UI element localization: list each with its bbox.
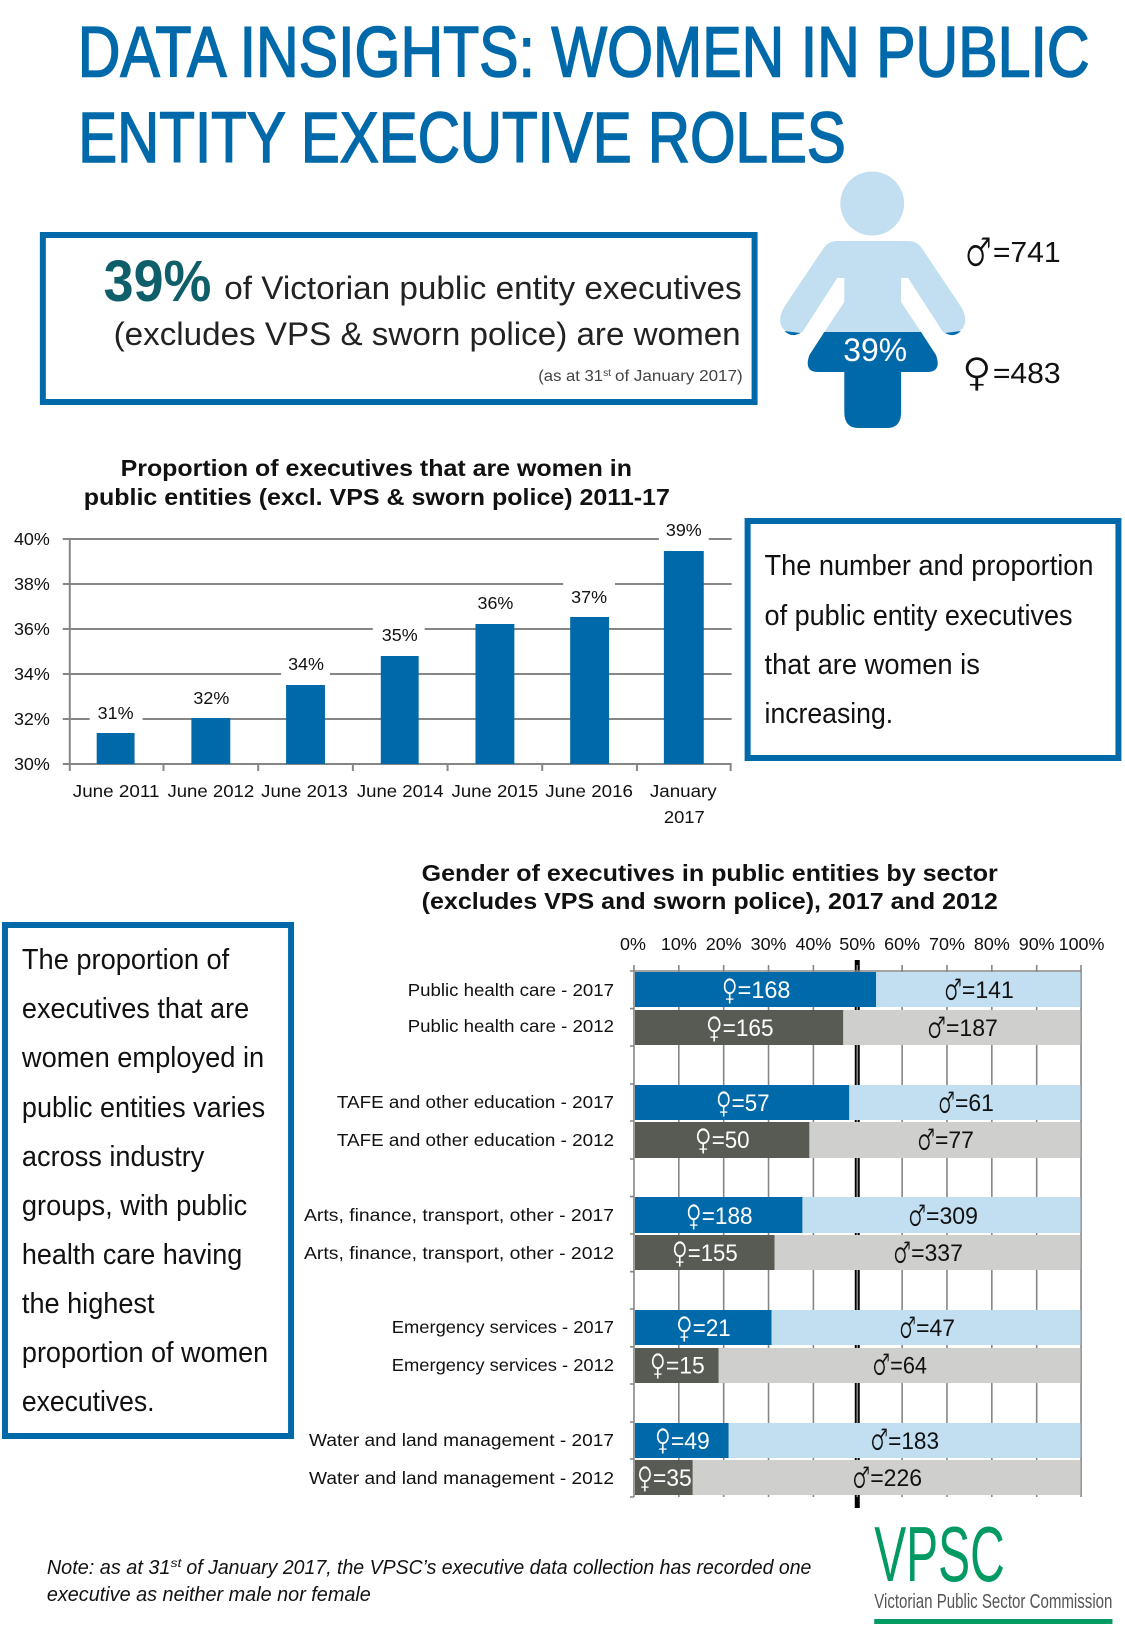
bar chart: proportion of executives that are women 2011-17: 34% bbox=[288, 654, 324, 674]
footnote: st bbox=[170, 1556, 182, 1570]
callout: proportion varies across industry groups: executives that are bbox=[22, 993, 249, 1025]
bar: Water and land management 2017: ♀ bbox=[655, 1423, 671, 1458]
bar chart: proportion of executives that are women 2011-17: 32% bbox=[14, 709, 50, 729]
footnote bbox=[47, 1556, 811, 1606]
bar: Emergency services 2012 bbox=[392, 1348, 1081, 1383]
stacked bar chart: gender by sector: 20% bbox=[706, 934, 742, 954]
bar: TAFE and other education 2017: ♂ bbox=[938, 1086, 955, 1121]
callout: 39% of executives: (as at 31 bbox=[538, 368, 603, 385]
bar: Emergency services 2017: ♂ bbox=[899, 1311, 916, 1346]
stacked bar chart: gender by sector bbox=[304, 934, 1104, 1508]
bar: Public health care 2012: Public health care - 2012 bbox=[408, 1016, 614, 1036]
bar chart: proportion of executives that are women 2011-17: 36% bbox=[14, 619, 50, 639]
callout: 39% of executives: 39% bbox=[104, 250, 211, 314]
bar: Arts, finance, transport, other 2017: ♂ bbox=[908, 1199, 926, 1234]
bar chart: proportion of executives that are women 2011-17: 38% bbox=[14, 574, 50, 594]
logo: VPSC bbox=[874, 1511, 1112, 1624]
bar chart: proportion of executives that are women 2011-17: June 2014 bbox=[357, 781, 444, 801]
bar: TAFE and other education 2012: =77 bbox=[935, 1127, 974, 1154]
callout: 39% of executives: of Victorian public entity executives bbox=[224, 270, 742, 306]
bar: TAFE and other education 2017: =57 bbox=[732, 1090, 770, 1117]
bar chart: proportion of executives that are women 2011-17: June 2011 bbox=[73, 781, 159, 801]
bar: Emergency services 2017: =21 bbox=[693, 1315, 731, 1342]
bar chart: proportion of executives that are women 2011-17: 36% bbox=[477, 593, 513, 613]
bar: Water and land management 2012: Water and land management - 2012 bbox=[309, 1468, 614, 1488]
bar: Emergency services 2012: =64 bbox=[890, 1352, 927, 1380]
stacked bar chart: gender by sector: 40% bbox=[795, 934, 831, 954]
bar: Arts, finance, transport, other 2012: ♂ bbox=[893, 1236, 911, 1271]
callout: proportion varies across industry groups: the highest bbox=[22, 1288, 155, 1320]
bar: Arts, finance, transport, other 2012: ♀ bbox=[672, 1236, 688, 1271]
footnote: Note: as at 31 bbox=[47, 1557, 170, 1579]
bar: Arts, finance, transport, other 2017 bbox=[304, 1197, 1081, 1234]
bar: Arts, finance, transport, other 2017: ♀ bbox=[686, 1199, 702, 1234]
callout: proportion varies across industry groups: across industry bbox=[22, 1141, 205, 1173]
bar: Public health care 2017: ♂ bbox=[944, 973, 962, 1008]
bar: Public health care 2012: =187 bbox=[946, 1015, 998, 1042]
female count: ♀ bbox=[962, 350, 992, 396]
bar: Public health care 2012: =165 bbox=[723, 1015, 774, 1042]
bar chart: proportion of executives that are women 2011-17: 32% bbox=[193, 688, 229, 708]
male count bbox=[965, 230, 1061, 276]
bar: Arts, finance, transport, other 2012: =155 bbox=[688, 1240, 738, 1267]
bar: Emergency services 2012: =15 bbox=[666, 1352, 705, 1380]
bar: Water and land management 2017: Water and land management - 2017 bbox=[309, 1430, 614, 1450]
bar: Public health care 2012: ♂ bbox=[927, 1011, 946, 1046]
callout: 39% of executives: of January 2017) bbox=[615, 368, 743, 385]
bar chart: proportion of executives that are women 2011-17: 31% bbox=[98, 703, 134, 723]
bar: Arts, finance, transport, other 2012 bbox=[304, 1235, 1081, 1271]
bar: Water and land management 2012: ♀ bbox=[637, 1461, 653, 1496]
bar: Emergency services 2017: ♀ bbox=[676, 1311, 693, 1346]
bar: TAFE and other education 2012 bbox=[337, 1122, 1081, 1158]
callout: proportion varies across industry groups: The proportion of bbox=[22, 944, 230, 976]
stacked bar chart: gender by sector: 90% bbox=[1019, 934, 1055, 954]
bar: Public health care 2012: ♀ bbox=[706, 1011, 723, 1046]
bar: Emergency services 2017 bbox=[392, 1310, 1081, 1346]
stacked bar chart: gender by sector: 60% bbox=[884, 934, 920, 954]
title: ENTITY EXECUTIVE ROLES bbox=[78, 99, 846, 178]
bar chart: proportion of executives that are women 2011-17: 40% bbox=[14, 529, 50, 549]
callout: proportion varies across industry groups: public entities varies bbox=[22, 1092, 265, 1124]
bar chart: proportion of executives that are women 2011-17: June 2012 bbox=[167, 781, 254, 801]
bar: Emergency services 2017: =47 bbox=[916, 1315, 955, 1342]
bar chart: proportion of executives that are women 2011-17 bbox=[14, 520, 732, 827]
callout: number and proportion increasing: that are women is bbox=[765, 649, 980, 681]
bar: Emergency services 2012: Emergency services - 2012 bbox=[392, 1355, 614, 1375]
bar chart: proportion of executives that are women 2011-17: 34% bbox=[14, 664, 50, 684]
callout: number and proportion increasing: increasing. bbox=[765, 698, 893, 730]
heading: proportion chart bbox=[84, 455, 670, 510]
bar: Public health care 2017: Public health care - 2017 bbox=[408, 980, 614, 1000]
callout: 39% of executives: st bbox=[603, 368, 611, 379]
bar chart: proportion of executives that are women 2011-17: June 2015 bbox=[452, 781, 538, 801]
bar: Public health care 2017: =141 bbox=[962, 977, 1014, 1004]
callout: number and proportion increasing bbox=[748, 521, 1118, 758]
bar: Emergency services 2012: ♂ bbox=[872, 1348, 890, 1383]
callout: proportion varies across industry groups bbox=[5, 925, 291, 1436]
callout: number and proportion increasing: of public entity executives bbox=[765, 600, 1073, 632]
bar: TAFE and other education 2017: ♀ bbox=[716, 1086, 732, 1121]
bar: TAFE and other education 2017 bbox=[337, 1085, 1081, 1121]
callout: 39% of executives bbox=[43, 235, 755, 402]
callout: proportion varies across industry groups: women employed in bbox=[21, 1042, 264, 1074]
male count: ♂ bbox=[965, 230, 992, 276]
bar: Public health care 2017: =168 bbox=[738, 977, 790, 1004]
bar: TAFE and other education 2012: TAFE and other education - 2012 bbox=[337, 1130, 614, 1150]
female count bbox=[962, 350, 1061, 396]
bar: TAFE and other education 2012: ♂ bbox=[917, 1123, 935, 1158]
icon: woman figure 39% filled: 39% bbox=[843, 332, 907, 368]
bar: Water and land management 2012: =35 bbox=[653, 1465, 692, 1492]
heading: proportion chart: Proportion of executives that are women in bbox=[121, 455, 632, 481]
bar chart: proportion of executives that are women 2011-17: June 2013 bbox=[261, 781, 348, 801]
female count: =483 bbox=[993, 358, 1061, 390]
stacked bar chart: gender by sector: 0% bbox=[620, 934, 646, 954]
callout: 39% of executives: (excludes VPS & sworn police) are women bbox=[114, 316, 741, 352]
callout: number and proportion increasing: The number and proportion bbox=[765, 550, 1094, 582]
callout: proportion varies across industry groups: proportion of women bbox=[22, 1337, 268, 1369]
heading: proportion chart: public entities (excl. VPS & sworn police) 2011-17 bbox=[84, 484, 670, 510]
bar chart: proportion of executives that are women 2011-17: 39% bbox=[666, 520, 702, 540]
bar: Arts, finance, transport, other 2017: Arts, finance, transport, other - 2017 bbox=[304, 1205, 614, 1225]
bar: Arts, finance, transport, other 2012: Arts, finance, transport, other - 2012 bbox=[304, 1243, 614, 1263]
bar: TAFE and other education 2012: =50 bbox=[712, 1127, 750, 1154]
bar: Public health care 2012 bbox=[408, 1010, 1081, 1046]
bar chart: proportion of executives that are women 2011-17: 35% bbox=[382, 625, 418, 645]
stacked bar chart: gender by sector: 70% bbox=[929, 934, 965, 954]
bar chart: proportion of executives that are women 2011-17: 37% bbox=[571, 587, 607, 607]
heading: gender by sector chart: (excludes VPS and sworn police), 2017 and 2012 bbox=[422, 888, 998, 914]
bar: TAFE and other education 2012: ♀ bbox=[695, 1123, 712, 1158]
bar: Public health care 2017 bbox=[408, 972, 1081, 1008]
bar: Arts, finance, transport, other 2017: =309 bbox=[926, 1203, 978, 1230]
bar chart: proportion of executives that are women 2011-17: June 2016 bbox=[545, 781, 633, 801]
bar: Emergency services 2012: ♀ bbox=[650, 1348, 666, 1383]
bar: Public health care 2017: ♀ bbox=[722, 973, 738, 1008]
bar chart: proportion of executives that are women 2011-17: January bbox=[650, 781, 717, 801]
bar: Water and land management 2017: =183 bbox=[888, 1428, 939, 1455]
stacked bar chart: gender by sector: 10% bbox=[661, 934, 697, 954]
stacked bar chart: gender by sector: 80% bbox=[974, 934, 1010, 954]
logo: VPSC: VPSC bbox=[874, 1511, 1005, 1598]
callout: proportion varies across industry groups: executives. bbox=[22, 1386, 155, 1418]
bar: Arts, finance, transport, other 2017: =188 bbox=[702, 1203, 753, 1230]
stacked bar chart: gender by sector: 30% bbox=[751, 934, 787, 954]
icon: woman figure 39% filled bbox=[780, 172, 965, 428]
heading: gender by sector chart bbox=[422, 860, 998, 914]
bar: Water and land management 2012: =226 bbox=[870, 1465, 922, 1492]
bar: Water and land management 2012 bbox=[309, 1460, 1081, 1496]
callout: proportion varies across industry groups: groups, with public bbox=[22, 1190, 247, 1222]
male count: =741 bbox=[993, 237, 1061, 269]
bar: Emergency services 2017: Emergency services - 2017 bbox=[392, 1317, 614, 1337]
footnote: of January 2017, the VPSC’s executive data collection has recorded one bbox=[186, 1557, 811, 1579]
stacked bar chart: gender by sector: 50% bbox=[839, 934, 875, 954]
bar: Water and land management 2017: ♂ bbox=[870, 1423, 888, 1458]
title bbox=[78, 13, 1090, 178]
bar: Water and land management 2017: =49 bbox=[671, 1428, 710, 1455]
bar chart: proportion of executives that are women 2011-17: 2017 bbox=[664, 807, 705, 827]
bar: TAFE and other education 2017: =61 bbox=[955, 1090, 994, 1117]
stacked bar chart: gender by sector: 100% bbox=[1059, 934, 1104, 954]
bar: Water and land management 2012: ♂ bbox=[852, 1461, 870, 1496]
callout: proportion varies across industry groups: health care having bbox=[22, 1239, 242, 1271]
bar: Arts, finance, transport, other 2012: =337 bbox=[911, 1240, 963, 1267]
bar: Water and land management 2017 bbox=[309, 1423, 1081, 1458]
footnote: executive as neither male nor female bbox=[47, 1584, 371, 1606]
heading: gender by sector chart: Gender of executives in public entities by sector bbox=[422, 860, 998, 886]
bar chart: proportion of executives that are women 2011-17: 30% bbox=[14, 754, 50, 774]
bar: TAFE and other education 2017: TAFE and other education - 2017 bbox=[337, 1092, 614, 1112]
